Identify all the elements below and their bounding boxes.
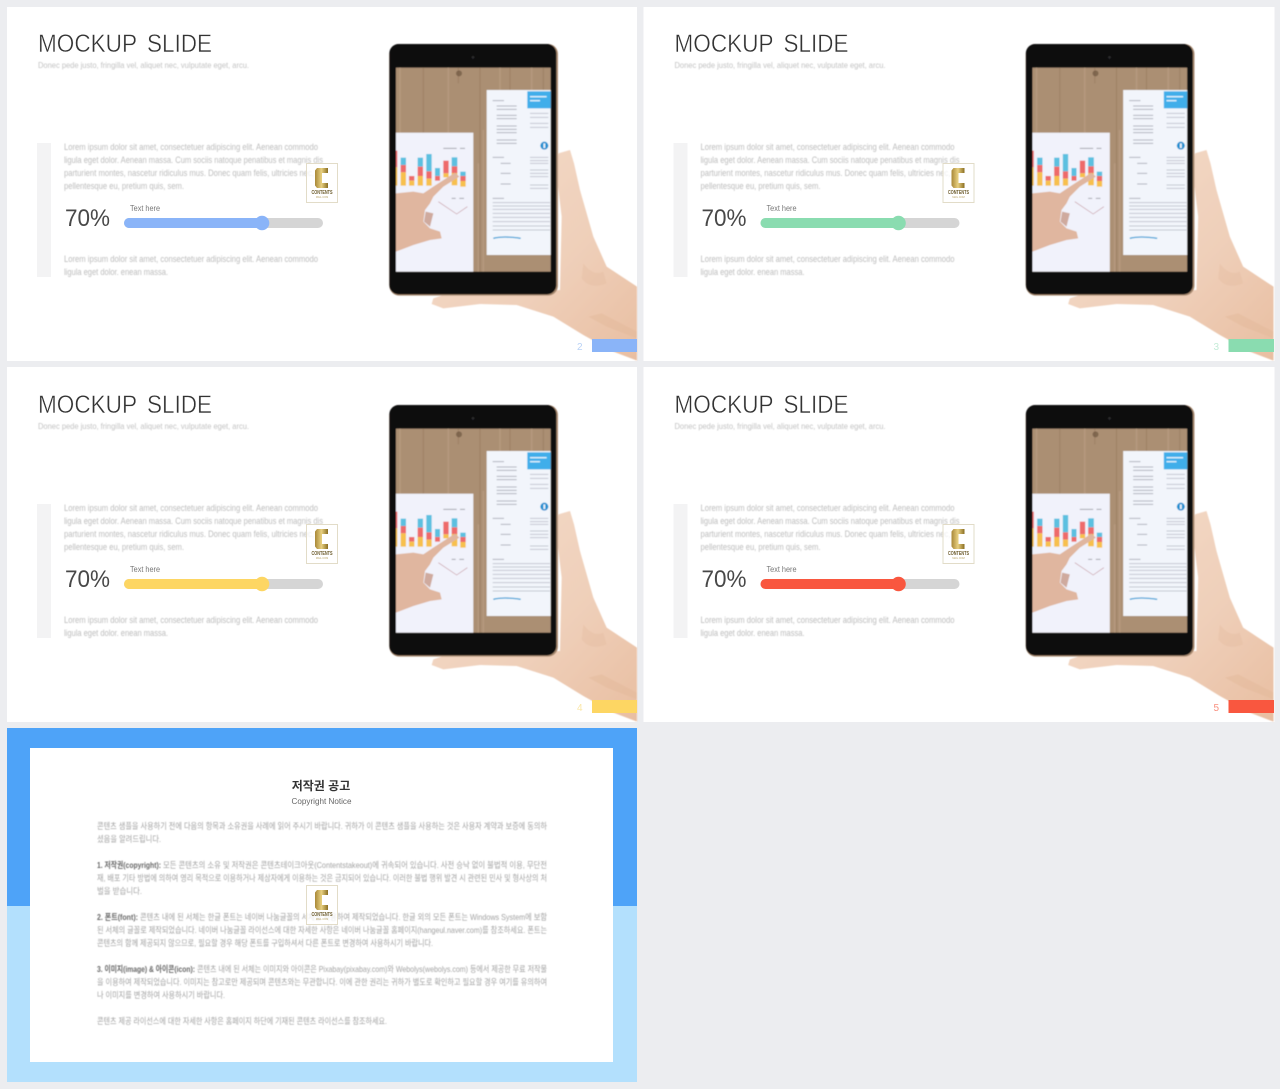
watermark logo: MAIL.COM xyxy=(316,918,328,921)
section 1: copyright: 벌을 받습니다. xyxy=(97,886,142,896)
notice subheading: Copyright Notice xyxy=(292,796,352,806)
section 2: font: 콘텐츠 내에 된 서체는 한글 폰트는 네이버 나눔글꼴의 서체를 사용하여 제작되었습니다. 한글 외의 모든 폰트는 Windows System에 보함 xyxy=(140,912,547,922)
watermark logo: MAIL.COM xyxy=(952,557,965,560)
license note: 콘텐츠 제공 라이선스에 대한 자세한 사항은 홈페이지 하단에 기재된 콘텐츠 라이선스를 참조하세요. xyxy=(97,1016,387,1026)
tablet held in hand xyxy=(389,405,637,722)
body text bottom xyxy=(700,615,954,638)
tablet held in hand xyxy=(1026,44,1273,361)
slider label: Text here xyxy=(130,203,160,213)
watermark logo xyxy=(943,524,974,564)
page number: 5 xyxy=(1214,703,1220,714)
slider label: Text here xyxy=(766,203,797,213)
body text bottom xyxy=(64,254,318,277)
slide subtitle: Donec pede justo, fringilla vel, aliquet nec, vulputate eget, arcu. xyxy=(38,60,249,70)
watermark logo xyxy=(943,164,974,202)
body text bottom: Lorem ipsum dolor sit amet, consectetuer adipiscing elit. Aenean commodo xyxy=(64,615,318,625)
progress slider xyxy=(760,577,960,591)
side accent bar xyxy=(37,143,51,277)
body text top: parturient montes, nascetur ridiculus mus. Donec quam felis, ultricies nec, xyxy=(64,529,314,539)
section 3: image and icon: 콘텐츠 내에 된 서체는 이미지와 아이콘은 Pixabay(pixabay.com)와 Webolys(webolys.com) 등에서 제공한 무료 저작물 xyxy=(197,964,547,974)
body text top: pellentesque eu, pretium quis, sem. xyxy=(64,181,184,191)
section 1: copyright: 재, 배포 기타 방법에 의하여 영리 목적으로 이용하거나 제삼자에게 이용하는 것은 금지되어 있습니다. 이러한 불법 행위 발견 시 관련된 민사 및 형사상의 처 xyxy=(97,873,547,883)
percentage value: 70% xyxy=(65,566,110,593)
slide title xyxy=(38,30,212,58)
watermark logo: CONTENTS xyxy=(312,551,333,557)
side accent bar xyxy=(674,143,688,277)
watermark logo: CONTENTS xyxy=(312,190,333,196)
tablet held in hand xyxy=(1026,405,1273,722)
progress slider xyxy=(124,577,323,591)
slide title: MOCKUP xyxy=(38,30,137,58)
body text top xyxy=(64,142,323,191)
section 2: font: 콘텐츠의 함께 제공되지 않으므로, 필요할 경우 해당 폰트를 구입하셔서 다른 폰트로 변경하여 사용하시기 바랍니다. xyxy=(97,938,433,948)
side accent bar xyxy=(674,504,688,638)
body text top xyxy=(700,503,960,552)
notice intro: 셨음을 알려드립니다. xyxy=(97,834,161,844)
slide title: MOCKUP xyxy=(674,391,774,419)
body text bottom: ligula eget dolor. enean massa. xyxy=(64,628,168,638)
body text top: pellentesque eu, pretium quis, sem. xyxy=(700,542,820,552)
body text top: Lorem ipsum dolor sit amet, consectetuer adipiscing elit. Aenean commodo xyxy=(700,503,954,513)
body text top: parturient montes, nascetur ridiculus mus. Donec quam felis, ultricies nec, xyxy=(700,529,950,539)
slide title: SLIDE xyxy=(147,391,212,419)
slide title: MOCKUP xyxy=(674,30,774,58)
notice intro: 콘텐츠 샘플을 사용하기 전에 다음의 항목과 소유권을 사례에 읽어 주시기 바랍니다. 귀하가 이 콘텐츠 샘플을 사용하는 것은 사용자 계약과 보증에 동의하 xyxy=(97,821,547,831)
body text top xyxy=(64,503,323,552)
watermark logo xyxy=(306,886,338,924)
slide subtitle: Donec pede justo, fringilla vel, aliquet nec, vulputate eget, arcu. xyxy=(674,421,886,431)
slide title: SLIDE xyxy=(784,391,848,419)
tablet held in hand xyxy=(389,44,637,361)
slider label: Text here xyxy=(130,564,160,574)
page tab xyxy=(592,700,637,713)
watermark logo: CONTENTS xyxy=(312,912,333,918)
body text bottom: Lorem ipsum dolor sit amet, consectetuer adipiscing elit. Aenean commodo xyxy=(64,254,318,264)
slide title xyxy=(674,30,848,58)
panel: copyright notice xyxy=(7,728,637,1082)
slide title: SLIDE xyxy=(147,30,212,58)
watermark logo xyxy=(306,524,338,564)
body text top: pellentesque eu, pretium quis, sem. xyxy=(64,542,184,552)
slider label: Text here xyxy=(766,564,797,574)
body text top: ligula eget dolor. Aenean massa. Cum sociis natoque penatibus et magnis dis xyxy=(700,516,960,526)
slide title: SLIDE xyxy=(784,30,848,58)
section 3: image and icon: 3. 이미지(image) & 아이콘(icon): xyxy=(97,964,195,974)
section 3: image and icon: 나 이미지를 변경하여 사용하시기 바랍니다. xyxy=(97,990,225,1000)
slide subtitle: Donec pede justo, fringilla vel, aliquet nec, vulputate eget, arcu. xyxy=(674,60,886,70)
percentage value: 70% xyxy=(65,205,110,232)
slide title: MOCKUP xyxy=(38,391,137,419)
section 3: image and icon xyxy=(97,964,547,1000)
body text bottom: Lorem ipsum dolor sit amet, consectetuer adipiscing elit. Aenean commodo xyxy=(700,254,954,264)
page tab xyxy=(592,339,637,352)
section 1: copyright: 1. 저작권(copyright): xyxy=(97,860,161,870)
side accent bar xyxy=(37,504,51,638)
page tab xyxy=(1228,700,1274,713)
percentage value: 70% xyxy=(702,566,746,593)
panel: slide 4 yellow xyxy=(7,367,637,722)
body text top: ligula eget dolor. Aenean massa. Cum sociis natoque penatibus et magnis dis xyxy=(64,155,323,165)
percentage value: 70% xyxy=(702,205,746,232)
body text top: parturient montes, nascetur ridiculus mus. Donec quam felis, ultricies nec, xyxy=(64,168,314,178)
watermark logo: MAIL.COM xyxy=(952,196,965,199)
slide title xyxy=(674,391,848,419)
page number: 4 xyxy=(577,703,583,714)
body text bottom: ligula eget dolor. enean massa. xyxy=(64,267,168,277)
body text top: Lorem ipsum dolor sit amet, consectetuer adipiscing elit. Aenean commodo xyxy=(64,142,318,152)
panel: slide 2 blue xyxy=(7,7,637,361)
notice heading: 저작권 공고 xyxy=(292,778,350,793)
body text top xyxy=(700,142,960,191)
watermark logo: CONTENTS xyxy=(948,190,970,196)
body text bottom: Lorem ipsum dolor sit amet, consectetuer adipiscing elit. Aenean commodo xyxy=(700,615,954,625)
progress slider xyxy=(760,216,960,230)
body text bottom: ligula eget dolor. enean massa. xyxy=(700,628,804,638)
body text bottom xyxy=(64,615,318,638)
body text top: Lorem ipsum dolor sit amet, consectetuer adipiscing elit. Aenean commodo xyxy=(64,503,318,513)
watermark logo: MAIL.COM xyxy=(316,196,328,199)
section 2: font: 된 서체의 글꼴로 제작되었습니다. 네이버 나눔글꼴 라이선스에 대한 자세한 사항은 네이버 나눔글꼴 홈페이지(hangeul.naver.com)를 참조하세요. 폰트는 xyxy=(97,925,547,935)
panel: slide 3 green xyxy=(644,7,1274,361)
page number: 2 xyxy=(577,342,583,353)
notice intro xyxy=(97,821,547,844)
section 1: copyright: 모든 콘텐츠의 소유 및 저작권은 콘텐츠테이크아웃(Contentstakeout)에 귀속되어 있습니다. 사전 승낙 없이 불법적 이용, 무단전 xyxy=(163,860,547,870)
body text bottom: ligula eget dolor. enean massa. xyxy=(700,267,804,277)
body text top: ligula eget dolor. Aenean massa. Cum sociis natoque penatibus et magnis dis xyxy=(64,516,323,526)
section 3: image and icon: 을 이용하여 제작되었습니다. 이미지는 참고로만 제공되며 콘텐츠와는 무관합니다. 이에 관한 권리는 귀하가 별도로 확인하고 필요할 경우 여기를 유의하여 xyxy=(97,977,547,987)
body text top: Lorem ipsum dolor sit amet, consectetuer adipiscing elit. Aenean commodo xyxy=(700,142,954,152)
section 2: font xyxy=(97,912,547,948)
watermark logo: CONTENTS xyxy=(948,551,970,557)
body text top: parturient montes, nascetur ridiculus mus. Donec quam felis, ultricies nec, xyxy=(700,168,950,178)
section 1: copyright xyxy=(97,860,547,896)
panel: slide 5 red xyxy=(644,367,1274,722)
page number: 3 xyxy=(1214,342,1220,353)
page tab xyxy=(1228,339,1274,352)
watermark logo xyxy=(306,164,338,202)
progress slider xyxy=(124,216,323,230)
body text top: pellentesque eu, pretium quis, sem. xyxy=(700,181,820,191)
slide subtitle: Donec pede justo, fringilla vel, aliquet nec, vulputate eget, arcu. xyxy=(38,421,249,431)
body text bottom xyxy=(700,254,954,277)
body text top: ligula eget dolor. Aenean massa. Cum sociis natoque penatibus et magnis dis xyxy=(700,155,960,165)
watermark logo: MAIL.COM xyxy=(316,557,328,560)
slide title xyxy=(38,391,212,419)
section 2: font: 2. 폰트(font): xyxy=(97,912,138,922)
